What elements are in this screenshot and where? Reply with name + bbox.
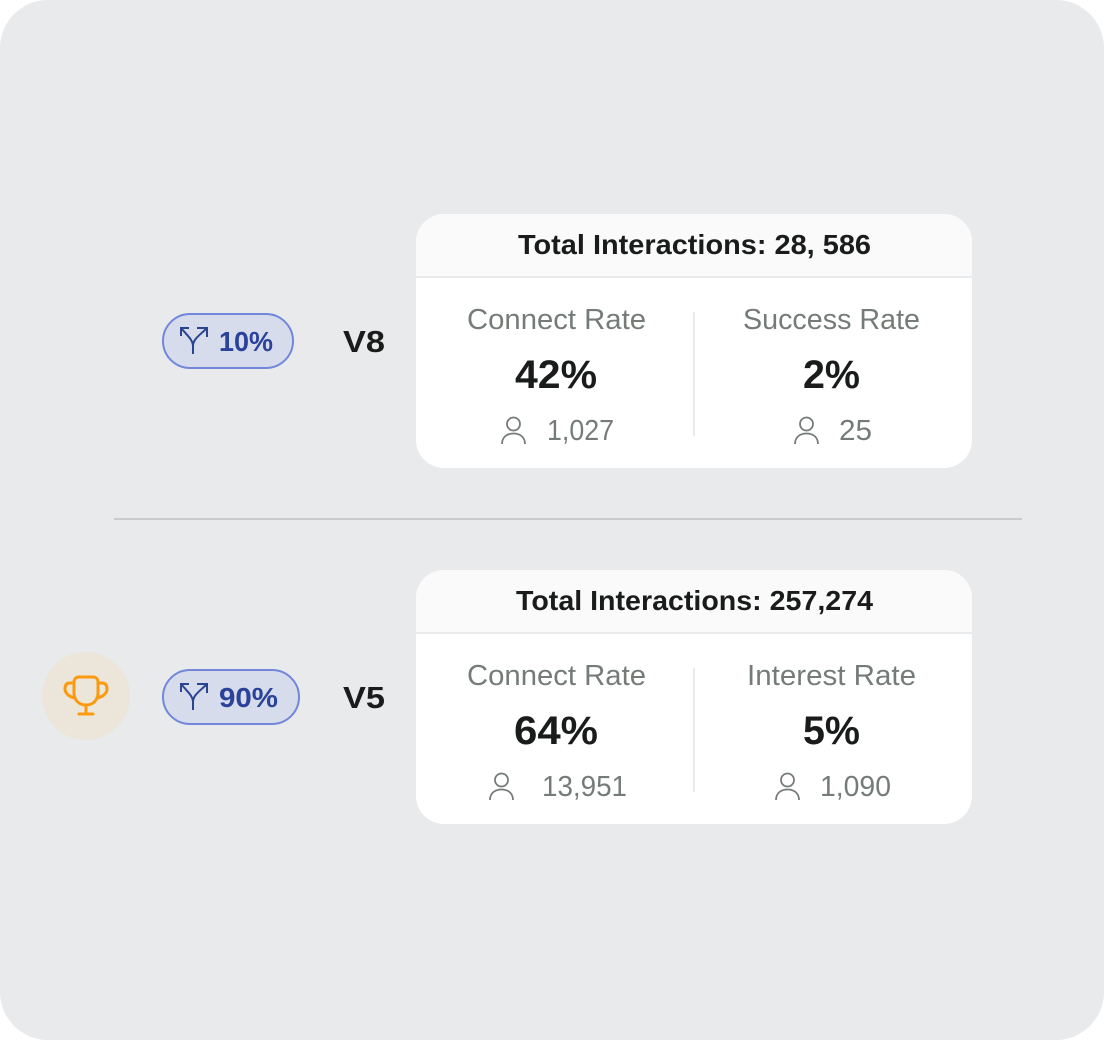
metric: connect rate xyxy=(467,304,646,447)
metric: interest rate: 1,090 xyxy=(820,771,891,803)
metric: interest rate: 5% xyxy=(803,709,860,753)
card header xyxy=(416,590,972,634)
icon: person xyxy=(776,774,799,800)
metric: success rate: 2% xyxy=(803,353,860,397)
icon: person xyxy=(795,418,818,444)
metric: connect rate: 13,951 xyxy=(542,771,627,803)
metric: success rate: Success Rate xyxy=(743,304,920,336)
metric: connect rate: 64% xyxy=(514,709,598,753)
icon: person xyxy=(502,418,525,444)
icon: person xyxy=(490,774,513,800)
version label: V5: V5 xyxy=(343,680,385,715)
split percentage: 90% xyxy=(219,682,278,713)
card header: Total Interactions: 28, 586 xyxy=(518,229,871,260)
metric: interest rate: Interest Rate xyxy=(747,660,916,692)
row: V8 xyxy=(163,214,972,468)
metric: success rate xyxy=(743,304,920,447)
card header: Total Interactions: 257,274 xyxy=(516,585,873,616)
metric: interest rate xyxy=(747,660,916,803)
card header xyxy=(416,234,972,278)
metric: success rate: 25 xyxy=(839,415,872,447)
split percentage: 10% xyxy=(219,326,273,357)
version label: V8: V8 xyxy=(343,324,385,359)
metric: connect rate: Connect Rate xyxy=(467,660,646,692)
metric: connect rate xyxy=(467,660,646,803)
icon: split arrows xyxy=(181,684,207,710)
metric: connect rate: Connect Rate xyxy=(467,304,646,336)
badge: 10% traffic split xyxy=(163,314,293,368)
badge: 90% traffic split xyxy=(163,670,299,724)
row: V5 winner xyxy=(42,570,972,824)
icon: trophy xyxy=(42,652,130,740)
icon: split arrows xyxy=(181,328,207,354)
metric: connect rate: 1,027 xyxy=(547,415,614,447)
metric: connect rate: 42% xyxy=(515,353,597,397)
card: V5 metrics xyxy=(416,570,972,824)
card: V8 metrics xyxy=(416,214,972,468)
